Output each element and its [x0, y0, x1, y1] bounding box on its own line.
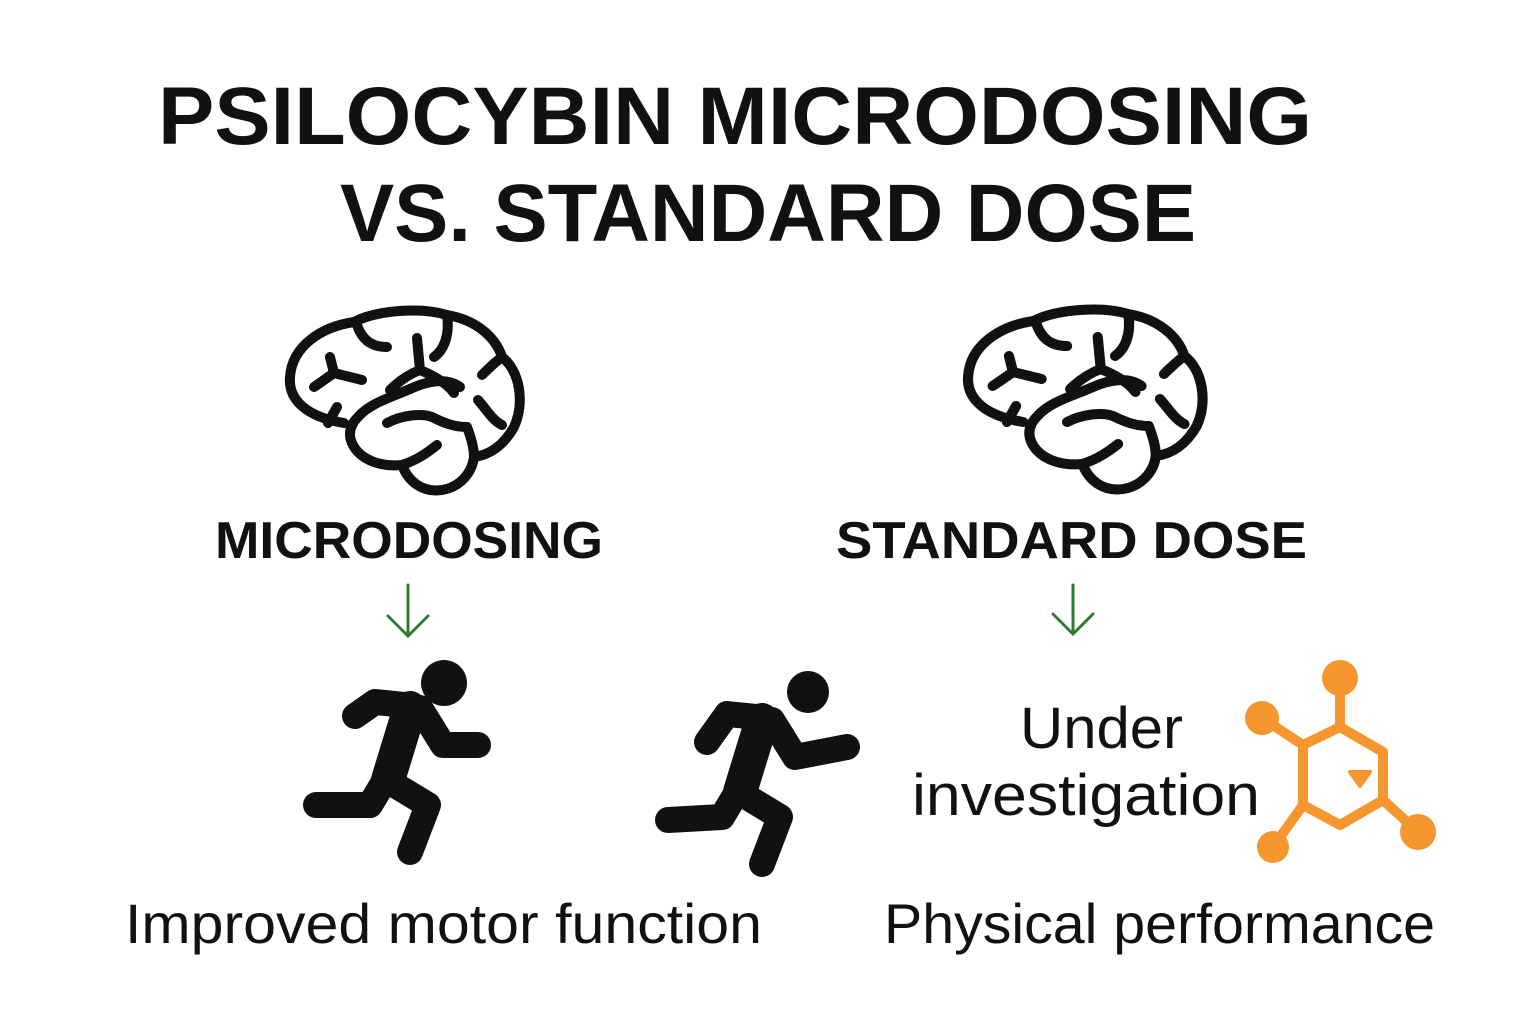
arrow: standard dose	[1053, 585, 1093, 634]
text: under investigation: Under	[1020, 696, 1183, 761]
icon: brain standard dose	[968, 310, 1203, 489]
title	[158, 71, 1312, 259]
heading: standard dose: STANDARD DOSE	[836, 512, 1307, 570]
heading: microdosing: MICRODOSING	[215, 512, 603, 570]
arrow: microdosing	[388, 585, 428, 636]
title: VS. STANDARD DOSE	[340, 168, 1196, 259]
icon: molecule	[1245, 660, 1436, 863]
title: PSILOCYBIN MICRODOSING	[158, 71, 1312, 162]
icon: brain microdosing	[290, 311, 520, 490]
text: under investigation: investigation	[912, 763, 1260, 828]
icon: runner 2	[668, 671, 847, 864]
caption: physical performance: Physical performance	[884, 892, 1435, 955]
icon: runner 1	[316, 660, 478, 852]
caption: improved motor function: Improved motor function	[125, 892, 762, 955]
text: under investigation	[912, 696, 1260, 828]
